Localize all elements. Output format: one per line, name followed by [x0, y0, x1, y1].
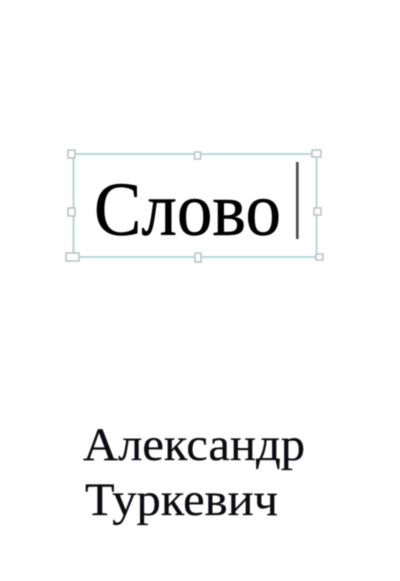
text selection box with handles — [66, 150, 323, 262]
author name: Туркевич — [85, 474, 278, 526]
title: Слово: Слово — [94, 168, 281, 252]
author name — [83, 419, 305, 526]
text cursor — [296, 162, 299, 239]
author name: Александр — [83, 419, 305, 471]
